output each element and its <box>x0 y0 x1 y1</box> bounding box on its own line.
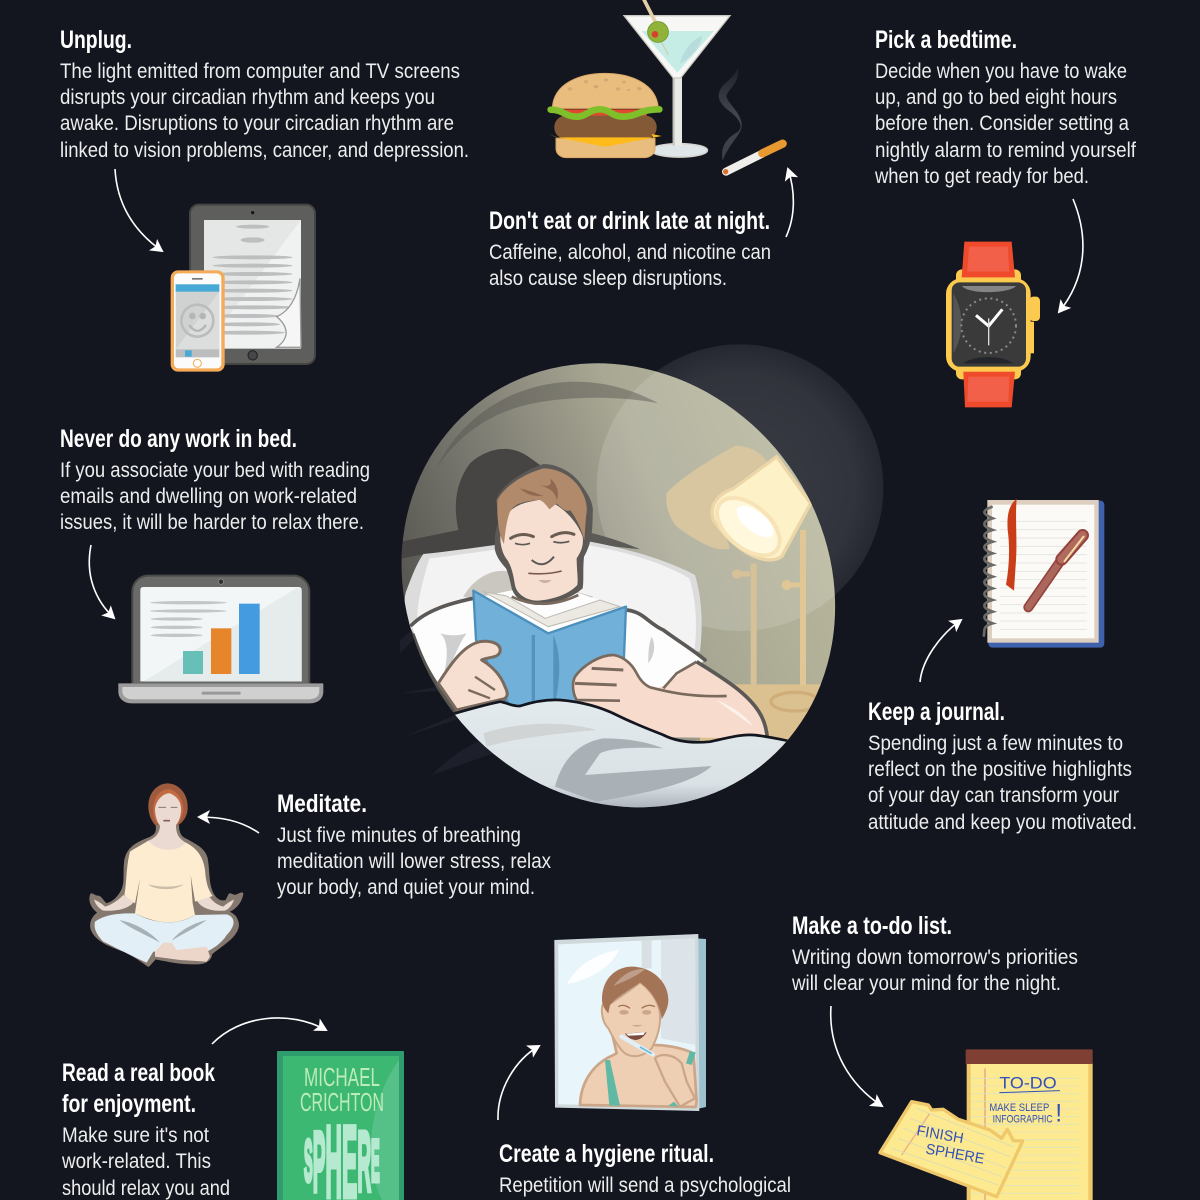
handwritten note: MAKE SLEEP <box>989 1102 1049 1114</box>
text block: caffeine: also cause sleep disruptions. <box>489 266 727 290</box>
text block: book body: should relax you and <box>62 1176 230 1200</box>
text block: book body: work-related. This <box>61 1149 211 1173</box>
right arm and hand <box>573 655 767 738</box>
icon: smoke <box>719 67 742 161</box>
arrow: to journal <box>920 620 961 682</box>
panel: keep a journal <box>868 499 1137 834</box>
pen <box>1028 535 1084 607</box>
text block: work body: If you associate your bed with reading <box>60 458 370 482</box>
arrow: to notepad <box>831 1006 882 1106</box>
head <box>495 464 593 605</box>
open book <box>473 591 626 707</box>
handwritten note: TO-DO <box>999 1073 1057 1092</box>
panel: pick a bedtime <box>874 26 1136 407</box>
panel: don't eat or drink late <box>489 0 793 290</box>
heading: to-do list: Make a to-do list. <box>792 912 952 940</box>
icon: notepad with scrap <box>880 1049 1093 1200</box>
text block: unplug body: awake. Disruptions to your circadian rhythm are <box>60 111 454 135</box>
text block: journal body: Spending just a few minutes to <box>868 731 1123 755</box>
text block: caffeine <box>489 240 771 290</box>
text block: to-do body <box>791 945 1078 995</box>
icon: burger <box>548 73 662 158</box>
text block: bedtime body: Decide when you have to wake <box>875 59 1127 83</box>
icon: book cover Sphere: S <box>304 1129 313 1193</box>
torn scrap: SPHERE <box>924 1142 986 1168</box>
light inside circle <box>596 372 835 631</box>
handwritten note <box>989 1073 1062 1128</box>
wall streak <box>437 382 658 468</box>
handwritten note: ! <box>1055 1101 1062 1128</box>
text block: book body: Make sure it's not <box>62 1123 209 1147</box>
shirt <box>412 590 705 693</box>
icon: journal and pen <box>983 499 1104 648</box>
blanket <box>454 698 788 808</box>
text block: journal body: reflect on the positive highlights <box>868 757 1132 781</box>
panel: unplug <box>60 26 469 372</box>
floor <box>700 684 821 768</box>
icon: martini glass <box>624 0 730 157</box>
panel: never do any work in bed <box>60 425 370 703</box>
icon: bathroom mirror with woman brushing teeth <box>554 934 706 1111</box>
icon: laptop with chart <box>118 576 323 703</box>
bedroom circle scene <box>402 363 836 808</box>
text block: journal body <box>868 731 1137 834</box>
pillow <box>405 542 702 652</box>
text block: work body: issues, it will be harder to relax there. <box>60 510 364 534</box>
arrow: to mirror <box>498 1046 539 1120</box>
icon: watch <box>946 242 1040 407</box>
icon: martini, burger and cigarette <box>548 0 783 174</box>
text block: bedtime body: when to get ready for bed. <box>874 164 1089 188</box>
panel: hygiene ritual <box>498 934 791 1197</box>
text block: meditate body <box>277 823 551 899</box>
background shadow streaks <box>400 623 540 775</box>
torn scrap: FINISH <box>915 1123 965 1147</box>
text block: journal body: attitude and keep you motivated. <box>868 810 1137 834</box>
arrow: to woman <box>199 817 259 833</box>
panel: read a real book <box>61 1018 404 1200</box>
arrow: to cigarette <box>786 169 793 237</box>
text block: bedtime body <box>874 59 1136 188</box>
handwritten note: INFOGRAPHIC <box>993 1114 1053 1126</box>
text block: bedtime body: before then. Consider setting a <box>875 111 1129 135</box>
icon: book cover Sphere: MICHAEL <box>304 1062 380 1092</box>
text block: unplug body <box>60 59 469 162</box>
icon: book cover Sphere <box>277 1051 404 1200</box>
heading: pick a bedtime: Pick a bedtime. <box>875 26 1017 54</box>
text block: work body <box>60 458 370 534</box>
icon: book cover Sphere: E <box>371 1129 380 1193</box>
text block: hygiene body: Repetition will send a psychological <box>499 1173 791 1197</box>
icon: cigarette <box>723 144 783 174</box>
text block: meditate body: meditation will lower stress, relax <box>277 849 551 873</box>
text block: caffeine: Caffeine, alcohol, and nicotine can <box>489 240 771 264</box>
torn scrap <box>880 1102 1023 1197</box>
arrow: to laptop <box>89 545 114 618</box>
text block: journal body: of your day can transform your <box>868 783 1119 807</box>
text block: to-do body: will clear your mind for the night. <box>791 971 1061 995</box>
text block: unplug body: linked to vision problems, cancer, and depression. <box>60 138 469 162</box>
heading: Unplug: Unplug. <box>60 26 132 54</box>
bar chart <box>183 604 260 674</box>
heading: read a real book: Read a real book <box>62 1059 215 1087</box>
heading: read a real book: for enjoyment. <box>62 1090 196 1118</box>
illustration: man reading in bed <box>383 344 883 840</box>
text block: bedtime body: nightly alarm to remind yourself <box>875 138 1136 162</box>
text block: meditate body: Just five minutes of breathing <box>277 823 521 847</box>
text block: unplug body: The light emitted from computer and TV screens <box>60 59 460 83</box>
arrow: to tablet <box>115 169 162 251</box>
text block: bedtime body: up, and go to bed eight hours <box>875 85 1117 109</box>
lamp <box>666 446 819 711</box>
head shadow <box>393 449 540 560</box>
heading: hygiene ritual: Create a hygiene ritual. <box>499 1140 714 1168</box>
panel: make a to-do list <box>791 912 1093 1200</box>
heading: don't eat or drink: Don't eat or drink late at night. <box>489 207 770 235</box>
text block: work body: emails and dwelling on work-related <box>60 484 357 508</box>
light glow behind <box>597 344 883 631</box>
icon: tablet and phone <box>171 205 315 372</box>
heading: meditate: Meditate. <box>277 790 367 818</box>
text block: to-do body: Writing down tomorrow's priorities <box>792 945 1078 969</box>
heading: read a real book <box>62 1059 215 1118</box>
arrow: to book <box>212 1018 326 1044</box>
panel: meditate <box>91 783 551 965</box>
text block: book body <box>61 1123 230 1200</box>
icon: meditating woman <box>91 783 242 965</box>
heading: keep a journal: Keep a journal. <box>868 698 1005 726</box>
text block: meditate body: your body, and quiet your mind. <box>277 875 535 899</box>
arrow: to watch <box>1059 199 1083 312</box>
heading: never do work in bed: Never do any work in bed. <box>60 425 297 453</box>
left hand <box>438 641 507 710</box>
text block: unplug body: disrupts your circadian rhythm and keeps you <box>60 85 435 109</box>
icon: book cover Sphere: CRICHTON <box>300 1087 384 1117</box>
